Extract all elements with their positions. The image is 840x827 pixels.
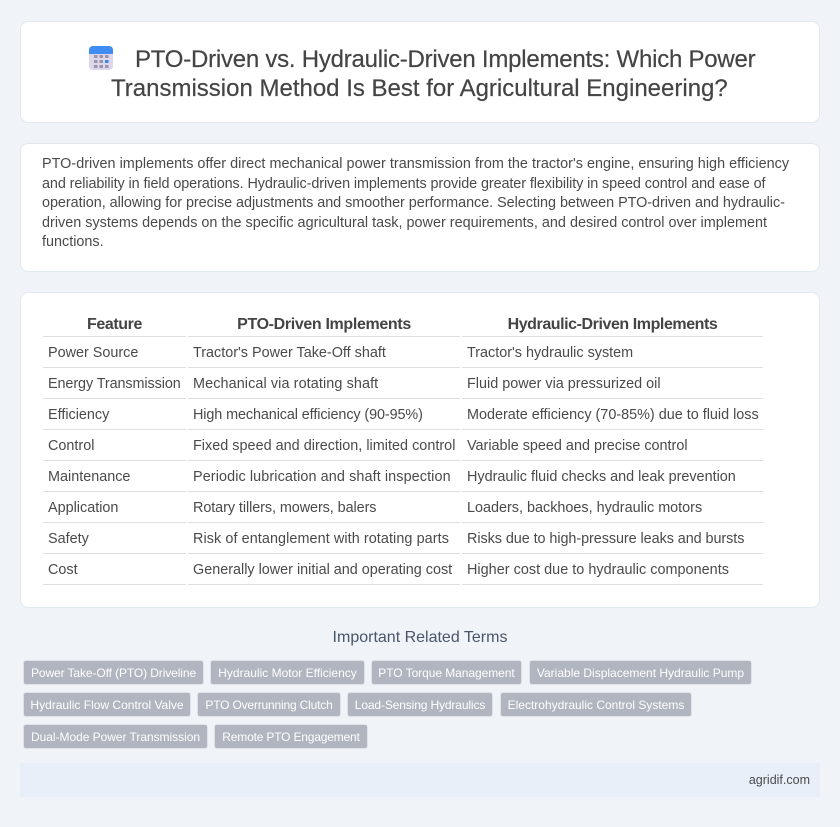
footer source text: agridif.com xyxy=(749,773,810,787)
panel: title card xyxy=(20,21,820,123)
related term tags xyxy=(23,660,752,749)
comparison table: Fixed speed and direction, limited control xyxy=(193,438,455,454)
comparison table: Mechanical via rotating shaft xyxy=(193,376,378,392)
related term tags: Hydraulic Motor Efficiency xyxy=(218,666,357,680)
comparison table: Maintenance xyxy=(48,469,130,485)
text block: introduction: operation, allowing for precise adjustments and smoother performance. Selecting between PTO-driven and hydraulic- xyxy=(42,195,785,211)
related term tags: Electrohydraulic Control Systems xyxy=(508,698,684,712)
comparison table: Energy Transmission xyxy=(48,376,181,392)
title: PTO-Driven vs. Hydraulic-Driven Implements: Which Power xyxy=(135,46,755,73)
comparison table: Power Source xyxy=(48,345,138,361)
comparison table: Cost xyxy=(48,562,78,578)
comparison table: Fluid power via pressurized oil xyxy=(467,376,661,392)
comparison table: Generally lower initial and operating cost xyxy=(193,562,452,578)
heading: related terms: Important Related Terms xyxy=(333,629,507,646)
related term tags: Load-Sensing Hydraulics xyxy=(355,698,485,712)
comparison table: Risks due to high-pressure leaks and bursts xyxy=(467,531,744,547)
panel: comparison table card xyxy=(20,292,820,608)
text block: introduction: and reliability in field operations. Hydraulic-driven implements provide greater flexibility in speed control and ease of xyxy=(42,176,765,192)
text block: introduction: PTO-driven implements offer direct mechanical power transmission from the tractor's engine, ensuring high efficiency xyxy=(42,156,789,172)
text block: introduction: functions. xyxy=(42,234,104,250)
related term tags: PTO Overrunning Clutch xyxy=(205,698,333,712)
comparison table: High mechanical efficiency (90-95%) xyxy=(193,407,423,423)
comparison table: Tractor's Power Take-Off shaft xyxy=(193,345,386,361)
comparison table: Periodic lubrication and shaft inspection xyxy=(193,469,451,485)
comparison table: Risk of entanglement with rotating parts xyxy=(193,531,449,547)
text block: introduction xyxy=(42,156,789,250)
related term tags: Remote PTO Engagement xyxy=(222,730,360,744)
comparison table: Moderate efficiency (70-85%) due to fluid loss xyxy=(467,407,759,423)
comparison table: Higher cost due to hydraulic components xyxy=(467,562,729,578)
comparison table: Variable speed and precise control xyxy=(467,438,688,454)
footer bar xyxy=(20,763,820,797)
comparison table: Rotary tillers, mowers, balers xyxy=(193,500,376,516)
comparison table: Hydraulic fluid checks and leak prevention xyxy=(467,469,736,485)
comparison table: Application xyxy=(48,500,118,516)
text block: introduction: driven systems depends on the specific agricultural task, power requirements, and desired control over implement xyxy=(42,214,767,230)
icon: calendar xyxy=(89,46,113,70)
comparison table: Tractor's hydraulic system xyxy=(467,345,633,361)
related term tags: Hydraulic Flow Control Valve xyxy=(30,698,184,712)
comparison table xyxy=(43,316,763,585)
panel: introduction card xyxy=(20,143,820,272)
related term tags: Power Take-Off (PTO) Driveline xyxy=(31,666,196,680)
title xyxy=(111,46,756,102)
comparison table: Control xyxy=(48,438,94,454)
comparison table: Efficiency xyxy=(48,407,109,423)
related term tags: Variable Displacement Hydraulic Pump xyxy=(537,666,744,680)
comparison table: Safety xyxy=(48,531,89,547)
comparison table: PTO-Driven Implements xyxy=(237,316,411,333)
title: Transmission Method Is Best for Agricultural Engineering? xyxy=(111,75,728,102)
related term tags: PTO Torque Management xyxy=(378,666,515,680)
comparison table: Feature xyxy=(87,316,142,333)
comparison table: Hydraulic-Driven Implements xyxy=(508,316,717,333)
related term tags: Dual-Mode Power Transmission xyxy=(31,730,200,744)
comparison table: Loaders, backhoes, hydraulic motors xyxy=(467,500,702,516)
